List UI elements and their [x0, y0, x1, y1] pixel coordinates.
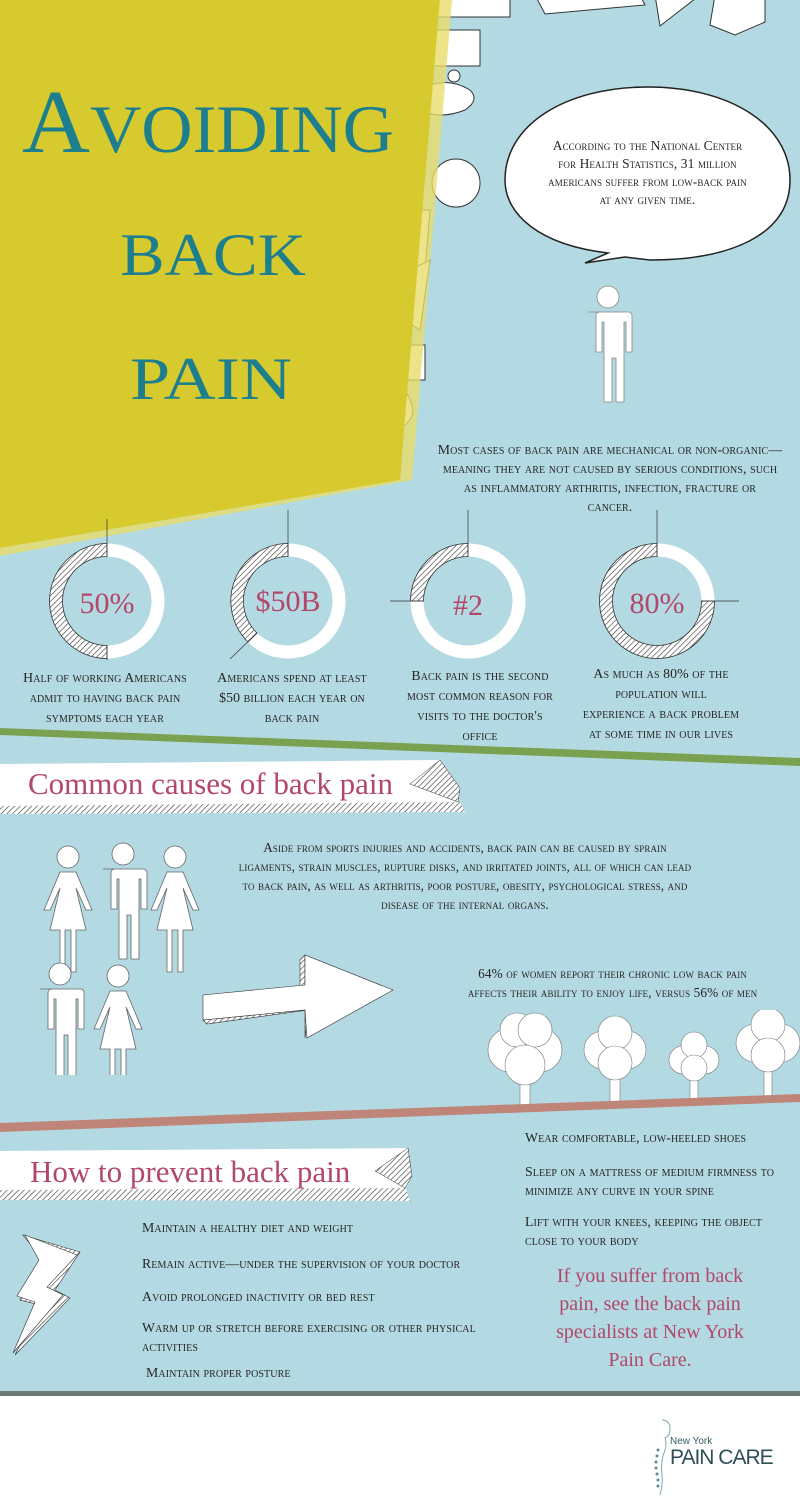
icon: lightning bolt	[12, 1234, 80, 1356]
text: women stat: affects their ability to enjoy life, versus 56% of men	[468, 985, 757, 1000]
stat captions	[23, 666, 739, 743]
stat captions: Back pain is the second	[411, 668, 549, 683]
yellow title panel	[0, 0, 440, 548]
bubble text: According to the National Center	[553, 138, 742, 153]
list: prevention left: Remain active—under the supervision of your doctor	[142, 1256, 460, 1271]
bubble text	[548, 138, 747, 207]
list: prevention right	[525, 1130, 774, 1248]
stat captions: Half of working Americans	[23, 670, 187, 685]
donut charts	[49, 510, 739, 660]
list: prevention left: Maintain proper posture	[146, 1365, 291, 1380]
bottom divider	[0, 1391, 800, 1396]
stat captions: $50 billion each year on	[219, 690, 365, 705]
arrow	[202, 954, 394, 1038]
logo	[654, 1420, 773, 1496]
donut #2: #2	[453, 589, 483, 622]
title: PAIN	[130, 346, 292, 412]
list: prevention right: Lift with your knees, keeping the object	[525, 1214, 762, 1229]
list: prevention left: Avoid prolonged inactivity or bed rest	[142, 1289, 375, 1304]
stat captions: back pain	[265, 710, 319, 725]
callout: If you suffer from back	[557, 1265, 743, 1287]
icon: person	[588, 286, 632, 402]
donut 50%: 50%	[80, 587, 134, 620]
text: causes paragraph: ligaments, strain muscles, rupture disks, and irritated joints, all of which can lead	[239, 859, 691, 874]
donut 80%: 80%	[630, 587, 684, 620]
green divider	[0, 728, 800, 766]
text: causes paragraph	[239, 840, 691, 912]
callout	[556, 1265, 744, 1371]
title: AVOIDING	[22, 73, 394, 172]
donut #2	[390, 509, 519, 652]
callout: pain, see the back pain	[559, 1293, 741, 1315]
callout: specialists at New York	[556, 1321, 744, 1343]
banner: prevent	[0, 1148, 412, 1201]
stat captions: at some time in our lives	[589, 726, 733, 741]
banner: common causes	[0, 760, 465, 814]
title: BACK	[120, 222, 306, 288]
text: causes paragraph: to back pain, as well as arthritis, poor posture, obesity, psychological stress, and	[243, 878, 687, 893]
donut 80%	[600, 509, 739, 658]
list: prevention right: minimize any curve in your spine	[525, 1183, 714, 1198]
stat captions: As much as 80% of the	[593, 666, 729, 681]
stat captions: population will	[615, 686, 707, 701]
stat captions: Americans spend at least	[217, 670, 367, 685]
logo: PAIN CARE	[670, 1446, 773, 1469]
decorative icons strip	[0, 0, 766, 556]
list: prevention left	[142, 1220, 476, 1380]
icon group: people	[40, 842, 200, 1075]
title	[22, 73, 394, 412]
stat captions: admit to having back pain	[30, 690, 180, 705]
list: prevention left: activities	[142, 1339, 198, 1354]
stat captions: office	[462, 728, 498, 743]
heading: How to prevent back pain	[30, 1154, 350, 1189]
donut 50%	[50, 519, 158, 671]
text: mechanical causes: meaning they are not caused by serious conditions, such	[443, 461, 777, 476]
text: mechanical causes: as inflammatory arthritis, infection, fracture or	[464, 480, 756, 495]
list: prevention right: Wear comfortable, low-heeled shoes	[525, 1130, 746, 1145]
list: prevention right: close to your body	[525, 1233, 639, 1248]
text: causes paragraph: Aside from sports injuries and accidents, back pain can be caused by sprain	[263, 840, 667, 855]
bubble text: americans suffer from low-back pain	[548, 174, 747, 189]
list: prevention left: Warm up or stretch before exercising or other physical	[142, 1320, 476, 1335]
callout: Pain Care.	[608, 1349, 692, 1371]
list: prevention right: Sleep on a mattress of medium firmness to	[525, 1164, 774, 1179]
stat captions: symptoms each year	[46, 710, 164, 725]
text: causes paragraph: disease of the internal organs.	[381, 897, 549, 912]
logo: New York	[670, 1436, 712, 1447]
text: mechanical causes: cancer.	[588, 499, 632, 514]
stat captions: most common reason for	[407, 688, 553, 703]
icon: trees	[488, 1010, 800, 1104]
list: prevention left: Maintain a healthy diet and weight	[142, 1220, 353, 1235]
brown divider	[0, 1094, 800, 1132]
donut $50B	[230, 509, 339, 659]
heading: Common causes of back pain	[28, 766, 393, 801]
stat captions: visits to the doctor's	[417, 708, 543, 723]
bubble text: for Health Statistics, 31 million	[558, 156, 737, 171]
speech bubble	[504, 86, 791, 264]
text: women stat: 64% of women report their chronic low back pain	[478, 966, 747, 981]
text: mechanical causes	[438, 442, 782, 514]
text: mechanical causes: Most cases of back pain are mechanical or non-organic—	[438, 442, 782, 457]
bubble text: at any given time.	[600, 192, 695, 207]
donut $50B: $50B	[255, 585, 321, 618]
stat captions: experience a back problem	[583, 706, 739, 721]
text: women stat	[468, 966, 757, 1000]
